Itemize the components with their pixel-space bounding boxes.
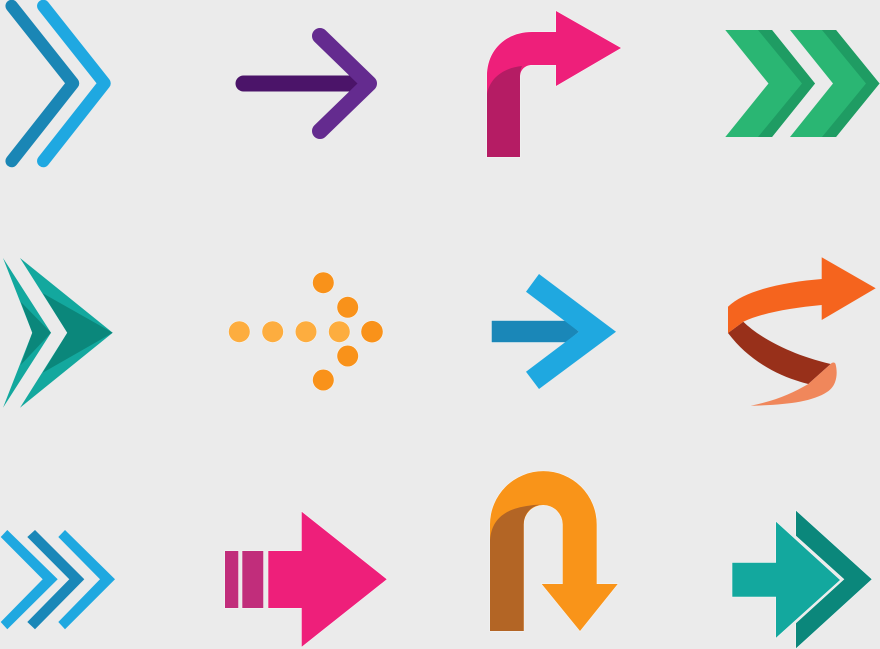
arrow head [526,274,616,389]
shaded shaft [490,504,542,631]
icon: teal faceted chevrons [3,258,113,408]
third chevron [58,530,115,629]
light chevron [43,6,104,161]
shaft dots [229,321,350,342]
icon: orange ribbon arrow [728,257,876,406]
wide bar [242,551,263,608]
icon: teal arrow with chevron [732,511,872,648]
shaded shaft [487,66,522,157]
front arrow [732,522,840,638]
small chevron [3,258,51,408]
icon: pink block arrow [225,512,387,647]
arrow head [320,36,369,131]
icon: green double chevron [725,30,880,137]
icon: purple line arrow [244,36,369,131]
ribbon tail [751,362,837,406]
large chevron [20,258,113,408]
ribbon back section [728,322,831,384]
icon: double rounded chevron [12,6,105,161]
icon: pink turn arrow [487,11,621,157]
dark chevron [12,6,73,161]
narrow bar [225,551,238,608]
icon: orange u-turn arrow [490,471,618,631]
icon: blue arrow [492,274,616,389]
ribbon front and head [728,257,876,333]
first chevron [1,530,58,629]
arrow body [268,512,387,647]
arrow shaft [492,321,579,342]
large chevron shade [43,293,113,373]
first chevron [725,30,815,137]
icon: triple chevron [1,530,115,629]
small chevron shade [21,302,51,365]
second chevron [790,30,880,137]
icon: dotted arrow [229,272,383,390]
second chevron shade [822,30,880,137]
u-turn body [490,471,618,631]
head dots [313,272,383,390]
back chevron [796,511,872,648]
arrow shaft [244,76,356,92]
second chevron [27,530,84,629]
first chevron shade [758,30,815,137]
turn body and head [487,11,621,157]
